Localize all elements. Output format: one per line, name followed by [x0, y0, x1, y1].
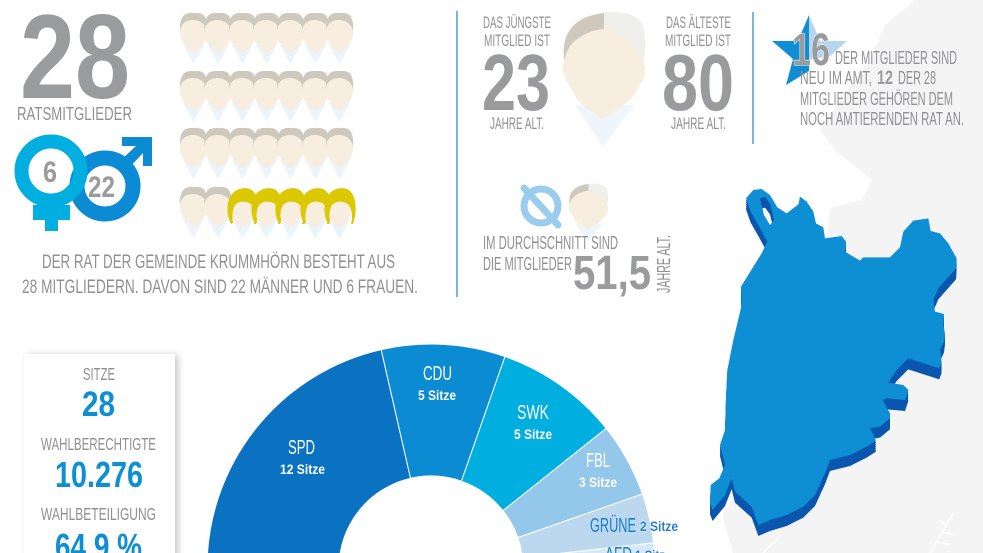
icon: large head	[563, 12, 645, 147]
background map	[722, 0, 983, 553]
panel: average age: DIE MITGLIEDER	[483, 253, 572, 274]
icon: gender symbols	[22, 137, 152, 231]
panel: average age: IM DURCHSCHNITT SIND	[483, 232, 618, 253]
panel: oldest member: JAHRE ALT.	[671, 115, 726, 133]
icon: average symbol	[524, 188, 558, 225]
segment: SPD	[207, 350, 411, 553]
panel: oldest member: MITGLIED IST	[665, 32, 731, 50]
panel: youngest member: 23	[482, 38, 550, 127]
panel: oldest member: DAS ÄLTESTE	[666, 14, 731, 32]
panel: new members text: NEU IM AMT,	[800, 67, 872, 88]
label: FBL	[579, 450, 617, 490]
stat: turnout	[41, 504, 156, 553]
icon: small head	[569, 183, 608, 242]
label: CDU: CDU	[423, 363, 452, 385]
label: SPD: 12 Sitze	[280, 461, 325, 477]
panel: youngest member: DAS JÜNGSTE	[483, 14, 551, 32]
chart: seat distribution half donut	[207, 344, 655, 553]
text block: council description: 28 MITGLIEDERN. DAVON SIND 22 MÄNNER UND 6 FRAUEN.	[22, 276, 418, 298]
label: GRÜNE: GRÜNE	[590, 515, 636, 537]
icon: star	[772, 15, 847, 85]
number: women: 6	[43, 156, 57, 189]
label: SPD	[280, 437, 325, 477]
label: SPD: SPD	[288, 437, 315, 459]
stat: eligible voters: 10.276	[55, 454, 143, 495]
label: Ratsmitglieder: RATSMITGLIEDER	[17, 103, 132, 124]
stat: eligible voters	[41, 434, 156, 495]
panel: oldest member	[662, 14, 734, 133]
segment: FBL	[503, 428, 642, 538]
panel: average age: 51,5	[573, 247, 651, 300]
stat: seats: 28	[82, 385, 115, 424]
panel: average age: JAHRE ALT.	[653, 235, 674, 293]
icon: female symbol	[22, 142, 80, 231]
panel: election stats card	[24, 354, 175, 553]
panel: new members text: 16	[792, 24, 830, 75]
panel: oldest member: 80	[662, 38, 734, 127]
label: CDU: 5 Sitze	[418, 387, 456, 403]
segment: SWK	[461, 357, 606, 511]
stat: seats: SITZE	[83, 364, 115, 384]
icon: male symbol	[77, 137, 152, 214]
label: CDU	[418, 363, 456, 403]
text block: council description	[22, 251, 418, 298]
panel: new members text: DER 28	[898, 67, 936, 88]
panel: new members text: 12	[877, 68, 893, 89]
text block: council description: DER RAT DER GEMEINDE KRUMMHÖRN BESTEHT AUS	[42, 251, 395, 273]
label: SWK	[514, 402, 552, 442]
number: men: 22	[88, 171, 115, 204]
label: AfD	[605, 544, 665, 553]
label: SWK: 5 Sitze	[514, 426, 552, 442]
label: FBL: FBL	[586, 450, 610, 472]
segment: AfD	[522, 543, 655, 553]
segment: CDU	[381, 344, 505, 481]
panel: youngest member: MITGLIED IST	[484, 32, 550, 50]
segment: GRÜNE	[518, 494, 654, 553]
panel: average age	[483, 232, 674, 300]
stat: turnout: WAHLBETEILIGUNG	[41, 504, 156, 524]
stat: eligible voters: WAHLBERECHTIGTE	[41, 434, 156, 454]
label: SWK: SWK	[517, 402, 549, 424]
pictogram: 28 council members	[180, 13, 356, 239]
panel: youngest member	[482, 14, 551, 133]
label: FBL: 3 Sitze	[579, 474, 617, 490]
panel: new members text	[792, 24, 964, 129]
map: Krummhörn municipality	[710, 189, 957, 536]
stat: seats	[82, 364, 115, 424]
panel: youngest member: JAHRE ALT.	[490, 115, 544, 133]
label: GRÜNE: 2 Sitze	[640, 518, 678, 534]
